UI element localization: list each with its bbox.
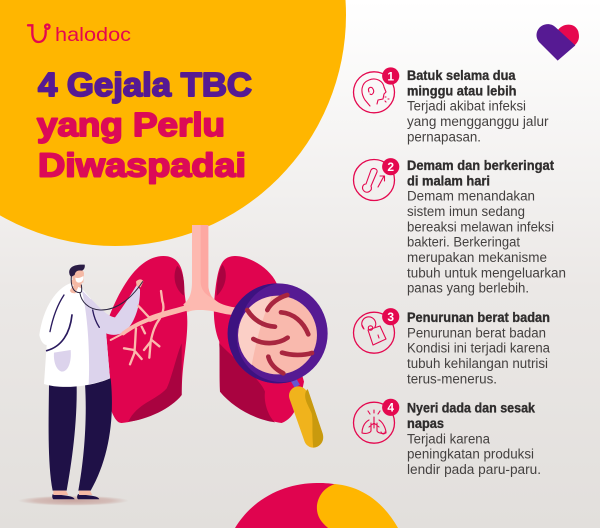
text: item 4: peningkatan produksi: [407, 447, 534, 462]
text: item 1: [407, 68, 549, 144]
item 1: cough: [354, 67, 549, 144]
text: item 1: pernapasan.: [407, 130, 481, 144]
text: item 2: tubuh untuk mengeluarkan: [407, 265, 566, 280]
left lung: [101, 256, 187, 423]
text: item 3: Penurunan berat badan: [407, 325, 546, 340]
text: item 3: [407, 310, 551, 386]
floor shadow: [18, 496, 128, 506]
icon: lungs: [354, 399, 399, 443]
yellow title circle: [0, 0, 346, 246]
text: item 4: [407, 401, 541, 477]
text: item 4: Terjadi karena: [407, 431, 491, 446]
magnifier handle: [293, 378, 323, 448]
text: item 3: terus-menerus.: [407, 371, 497, 386]
icon: thermometer: 2: [387, 160, 394, 174]
stethoscope: [71, 277, 143, 310]
text: item 2: panas yang berlebih.: [407, 281, 529, 296]
item 4: chest pain: [354, 399, 541, 477]
logo: halodoc: [28, 24, 131, 46]
text: item 4: Nyeri dada dan sesak: [407, 401, 536, 416]
text: item 2: bereaksi melawan infeksi: [407, 219, 554, 234]
text: item 3: Penurunan berat badan: [407, 310, 550, 325]
text: item 2: bakteri. Berkeringat: [407, 235, 520, 250]
icon: scale: 3: [387, 310, 394, 324]
title: Diwaspadai: [38, 148, 246, 185]
text: item 2: sistem imun sedang: [407, 204, 525, 219]
illustration: doctor: [18, 265, 143, 506]
illustration: bronchi and magnifier: [111, 283, 328, 448]
text: item 3: Kondisi ini terjadi karena: [407, 341, 551, 356]
lab coat: [39, 283, 110, 387]
logo wordmark: halodoc: [55, 24, 131, 46]
sleeve: [91, 285, 140, 335]
text: item 1: minggu atau lebih: [407, 83, 516, 98]
bottom decorative blob: [235, 483, 398, 528]
icon: scale: [354, 308, 399, 353]
icon: stethoscope: [28, 24, 49, 42]
icon: thermometer: [354, 158, 399, 200]
right lung: [214, 256, 304, 423]
icon: heart: [537, 24, 579, 61]
text: item 2: [407, 158, 566, 296]
text: item 1: Batuk selama dua: [407, 68, 516, 83]
illustration: lungs: [101, 225, 304, 423]
pocket: [54, 350, 71, 372]
title: yang Perlu: [37, 107, 225, 144]
icon: lungs: 4: [387, 401, 394, 415]
coat arm outlines: [47, 295, 99, 351]
text: item 1: Terjadi akibat infeksi: [407, 99, 526, 114]
text: item 4: lendir pada paru-paru.: [407, 462, 541, 477]
title: [37, 67, 252, 185]
item 2: fever: [354, 158, 566, 296]
text: item 2: merupakan mekanisme: [407, 250, 547, 265]
item 3: weight loss: [354, 308, 551, 386]
trachea: [183, 225, 235, 315]
text: item 2: di malam hari: [407, 173, 490, 188]
skin: ankles and neck: [53, 280, 92, 495]
text: item 1: yang mengganggu jalur: [407, 114, 549, 129]
text: item 4: napas: [407, 416, 444, 431]
magnifier lens: [228, 283, 328, 383]
title: 4 Gejala TBC: [38, 67, 252, 104]
text: item 2: Demam menandakan: [407, 189, 535, 204]
text: item 3: tubuh kehilangan nutrisi: [407, 356, 548, 371]
trousers: [49, 378, 112, 499]
bronchi: [111, 291, 187, 364]
coat shading: [82, 290, 110, 384]
icon: coughing head: [354, 67, 399, 113]
text: item 2: Demam dan berkeringat: [407, 158, 555, 173]
icon: coughing head: 1: [387, 69, 394, 83]
hand and head: [69, 265, 143, 293]
bacteria: [247, 295, 312, 373]
